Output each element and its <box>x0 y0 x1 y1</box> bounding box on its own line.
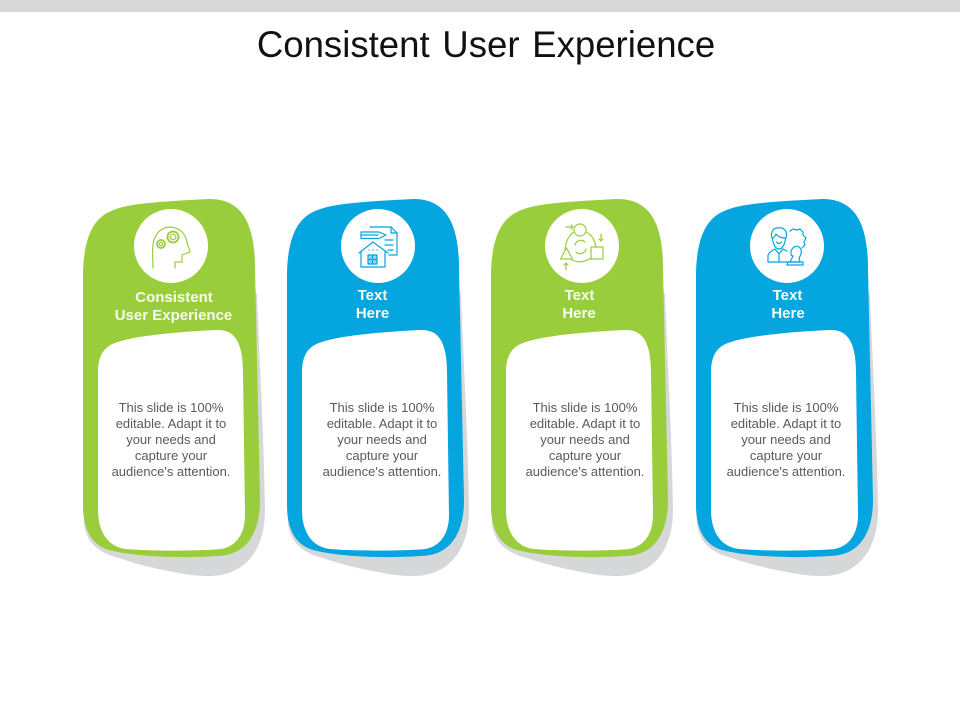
card body text: your needs and <box>337 432 427 447</box>
panel: text here 2 <box>287 199 469 576</box>
text area <box>711 330 858 551</box>
panel: text here 3 <box>491 199 673 576</box>
card body <box>83 199 260 557</box>
icon: house and document <box>359 227 397 267</box>
text area <box>98 330 245 551</box>
card shadow <box>83 288 265 576</box>
card body text: your needs and <box>741 432 831 447</box>
icon: head with gears <box>153 227 190 268</box>
card shadow <box>287 288 469 576</box>
panel: consistent user experience <box>83 199 265 576</box>
card body <box>491 199 668 557</box>
card body text: editable. Adapt it to <box>327 416 437 431</box>
card body text: audience's attention. <box>112 464 230 479</box>
card shadow <box>491 288 673 576</box>
icon: shapes cycle <box>560 224 603 270</box>
card body text: editable. Adapt it to <box>731 416 841 431</box>
icon circle <box>750 209 824 283</box>
card body text: audience's attention. <box>323 464 441 479</box>
panel: text here 4 <box>696 199 878 576</box>
card body text: your needs and <box>126 432 216 447</box>
card body text: editable. Adapt it to <box>116 416 226 431</box>
icon circle <box>134 209 208 283</box>
card heading: Consistent <box>135 289 213 306</box>
card body text: capture your <box>750 448 823 463</box>
card shadow <box>696 288 878 576</box>
card body text: This slide is 100% <box>330 400 435 415</box>
card heading: Text <box>773 287 802 304</box>
card body text: capture your <box>346 448 419 463</box>
card body text: audience's attention. <box>727 464 845 479</box>
icon circle <box>545 209 619 283</box>
card heading: Text <box>565 287 594 304</box>
icon: person with gear and chess knight <box>768 228 806 265</box>
card body text: This slide is 100% <box>734 400 839 415</box>
card body text: This slide is 100% <box>119 400 224 415</box>
card body text: audience's attention. <box>526 464 644 479</box>
title: Consistent User Experience <box>257 24 715 65</box>
card heading: Text <box>358 287 387 304</box>
icon circle <box>341 209 415 283</box>
card body text: editable. Adapt it to <box>530 416 640 431</box>
top bar <box>0 0 960 12</box>
card body text: capture your <box>135 448 208 463</box>
card body <box>696 199 873 557</box>
card body <box>287 199 464 557</box>
card body text: your needs and <box>540 432 630 447</box>
text area <box>506 330 653 551</box>
card body text: This slide is 100% <box>533 400 638 415</box>
card body text: capture your <box>549 448 622 463</box>
text area <box>302 330 449 551</box>
card heading: User Experience <box>115 307 232 324</box>
card heading: Here <box>771 305 805 322</box>
card heading: Here <box>356 305 389 322</box>
card heading: Here <box>562 305 596 322</box>
